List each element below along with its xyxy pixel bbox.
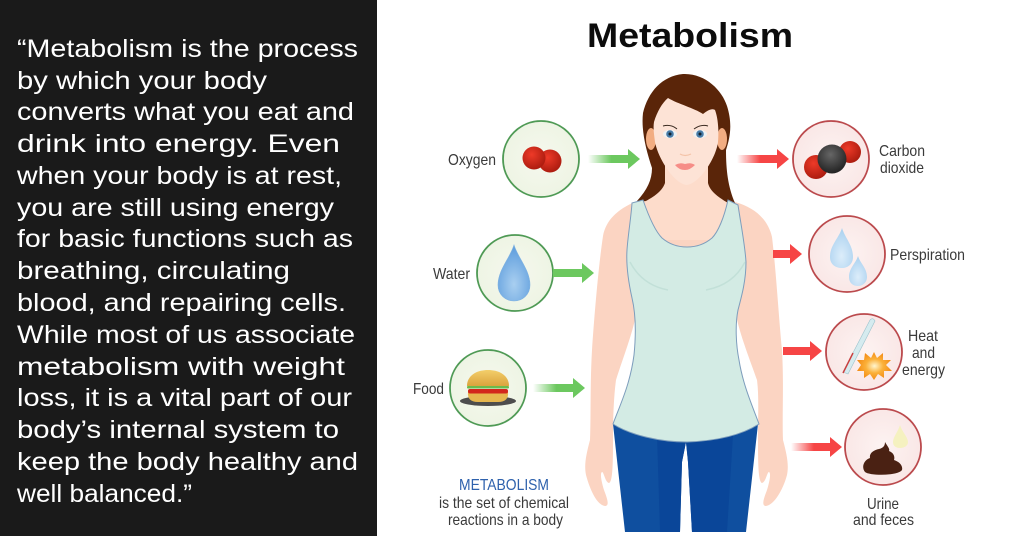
icon: water drop xyxy=(498,245,530,301)
outputs: carbon dioxide xyxy=(737,121,925,197)
outputs: heat and energy xyxy=(783,314,945,390)
food label: Food xyxy=(413,381,444,398)
tank top shading xyxy=(630,262,745,290)
feces label: and feces xyxy=(853,512,914,529)
inputs: oxygen xyxy=(448,121,640,197)
quote text: loss, it is a vital part of our xyxy=(17,384,352,412)
icon: oxygen molecule xyxy=(522,146,562,172)
carbon dioxide label line 2: dioxide xyxy=(880,160,924,177)
lips xyxy=(675,163,695,170)
urine circle xyxy=(845,409,921,485)
ears xyxy=(646,128,727,150)
eyebrows xyxy=(663,125,708,129)
perspiration circle xyxy=(809,216,885,292)
icon: feces xyxy=(863,442,902,475)
panel: quote background xyxy=(0,0,377,536)
icon: burger xyxy=(460,370,516,406)
inputs: food xyxy=(413,350,585,426)
quote text: you are still using energy xyxy=(17,194,335,222)
carbon dioxide circle xyxy=(793,121,869,197)
urine label: Urine xyxy=(867,496,899,513)
hair xyxy=(637,74,735,203)
arrow: oxygen in xyxy=(588,149,640,169)
arrow: water in xyxy=(553,263,594,283)
arrow: carbon dioxide out xyxy=(737,149,789,169)
eyes xyxy=(663,130,707,138)
arrow: heat out xyxy=(783,341,822,361)
arms and torso skin xyxy=(585,200,788,506)
quote text: well balanced.” xyxy=(16,480,192,508)
icon: thermometer xyxy=(843,319,875,374)
icon: urine drop xyxy=(893,425,908,448)
tank top xyxy=(613,200,759,442)
nose xyxy=(680,154,691,156)
water label: Water xyxy=(433,266,471,283)
quote text: “Metabolism is the process xyxy=(17,35,358,63)
icon: burst xyxy=(857,352,892,380)
arrow: perspiration out xyxy=(773,244,802,264)
heat circle xyxy=(826,314,902,390)
outputs: perspiration xyxy=(773,216,965,292)
quote text xyxy=(16,35,358,508)
oxygen circle xyxy=(503,121,579,197)
arrow: urine out xyxy=(791,437,842,457)
quote text: converts what you eat and xyxy=(17,98,354,126)
icon: sweat drops xyxy=(830,228,867,286)
oxygen label: Oxygen xyxy=(448,152,496,169)
caption: is the set of chemical xyxy=(439,495,569,512)
energy label: energy xyxy=(902,362,945,379)
carbon dioxide label: Carbon xyxy=(879,143,925,160)
heat label: Heat xyxy=(908,328,938,345)
food circle xyxy=(450,350,526,426)
perspiration label: Perspiration xyxy=(890,247,965,264)
inputs: water xyxy=(433,235,594,311)
quote text: when your body is at rest, xyxy=(16,162,342,190)
and label: and xyxy=(912,345,935,362)
quote text: body’s internal system to xyxy=(17,416,339,444)
quote text: While most of us associate xyxy=(17,321,355,349)
caption xyxy=(439,477,569,529)
face xyxy=(654,98,718,185)
quote text: for basic functions such as xyxy=(17,225,353,253)
caption: METABOLISM xyxy=(459,477,549,494)
caption: reactions in a body xyxy=(448,512,563,529)
icon: CO2 molecule xyxy=(804,141,861,179)
quote text: metabolism with weight xyxy=(17,353,345,381)
jeans xyxy=(613,424,758,532)
outputs: urine and feces xyxy=(791,409,921,529)
neck xyxy=(642,165,728,240)
quote text: breathing, circulating xyxy=(17,257,290,285)
quote text: by which your body xyxy=(17,67,268,95)
figure: woman xyxy=(585,74,788,532)
arrow: food in xyxy=(533,378,585,398)
quote text: blood, and repairing cells. xyxy=(17,289,346,317)
title: Metabolism xyxy=(587,17,793,55)
quote text: keep the body healthy and xyxy=(17,448,358,476)
water circle xyxy=(477,235,553,311)
quote text: drink into energy. Even xyxy=(17,130,340,158)
